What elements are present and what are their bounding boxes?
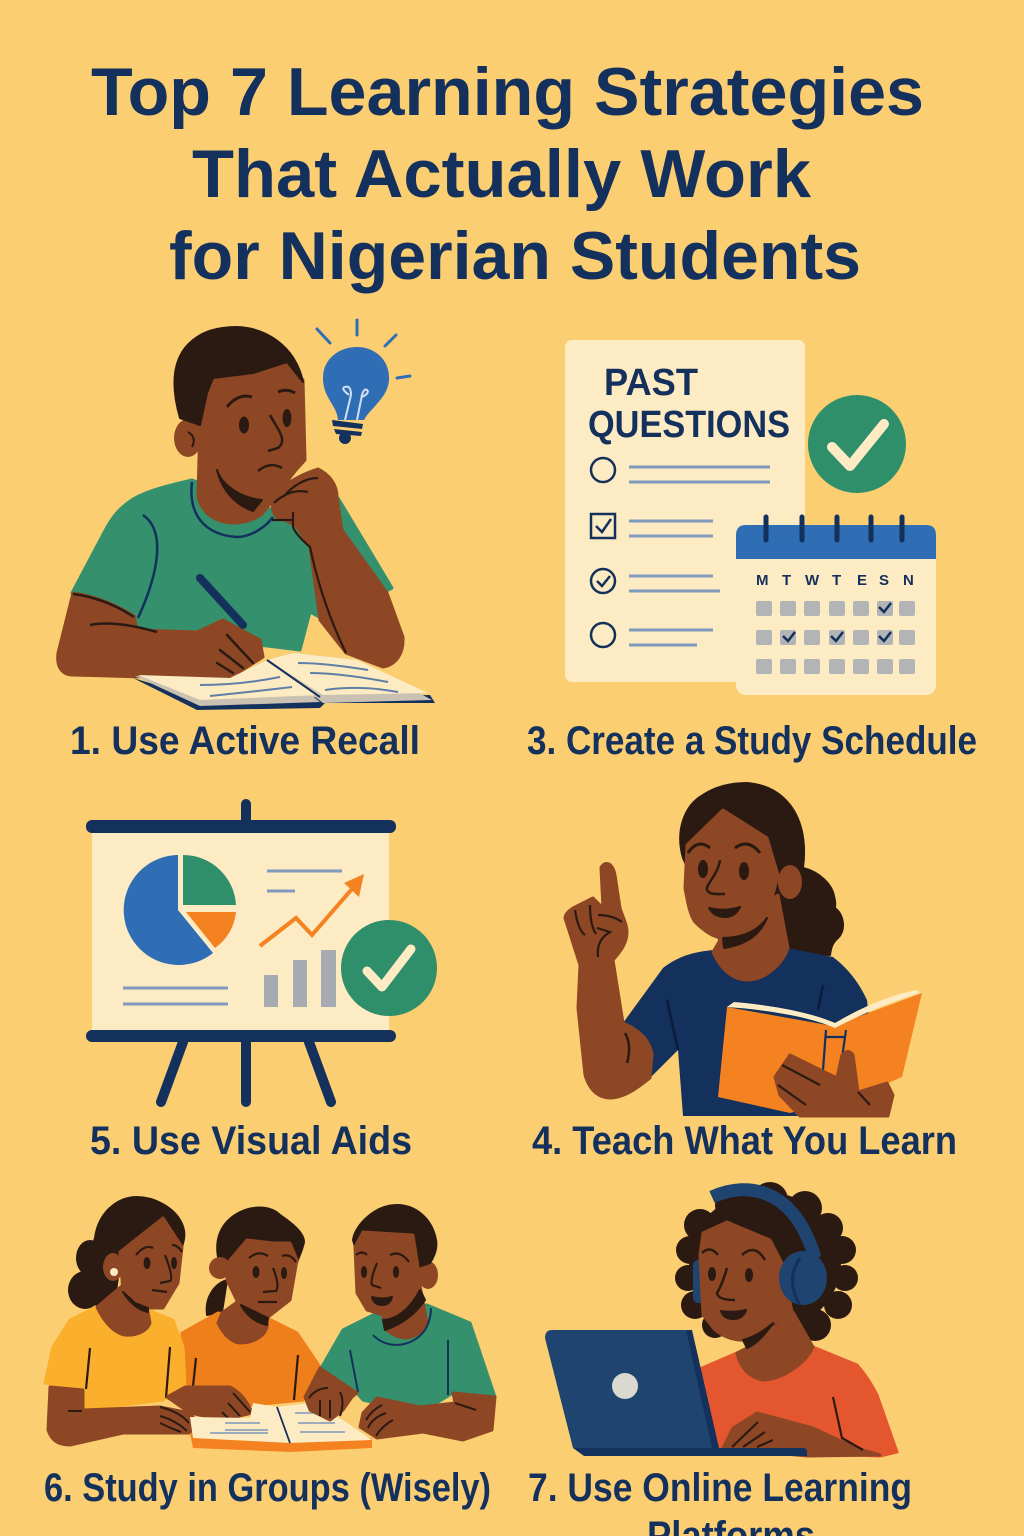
orange top [702, 1347, 897, 1456]
illustration: past questions and calendar: T [832, 572, 841, 589]
illustration: student using active recall [58, 320, 435, 710]
hair [680, 783, 843, 955]
illustration: past questions and calendar: PAST [604, 362, 698, 404]
light bulb [323, 347, 389, 420]
neck [737, 1312, 813, 1380]
board [92, 832, 389, 1030]
title: for Nigerian Students [169, 218, 861, 294]
left ear cup [693, 1260, 705, 1303]
shirt [72, 480, 392, 650]
illustration: study group [45, 1197, 495, 1452]
open book [133, 678, 435, 710]
neck [198, 420, 296, 523]
ear [778, 865, 802, 899]
illustration: presentation board [86, 804, 437, 1102]
illustration: past questions and calendar: E [857, 572, 867, 589]
label 7: 7. Use Online Learning [528, 1466, 912, 1510]
open book on table [190, 1403, 372, 1452]
girl in yellow shirt [45, 1197, 252, 1445]
pen [200, 578, 243, 625]
chin shadow [743, 1323, 773, 1348]
ear [174, 419, 202, 457]
pie chart [124, 855, 213, 965]
chin shadow [723, 918, 767, 948]
orange book [718, 993, 922, 1113]
hand holding book [775, 1052, 893, 1116]
title [91, 54, 924, 294]
neck [713, 895, 788, 980]
laptop [545, 1330, 717, 1448]
face [685, 810, 778, 938]
worksheet [565, 340, 805, 682]
illustration: past questions and calendar: T [782, 572, 791, 589]
label 1: 1. Use Active Recall [70, 719, 420, 763]
title: Top 7 Learning Strategies [91, 54, 924, 130]
hand on laptop [723, 1413, 880, 1456]
illustration: past questions and calendar: QUESTIONS [588, 404, 790, 446]
face [200, 362, 305, 498]
face [700, 1222, 792, 1340]
boy in green shirt [320, 1205, 495, 1408]
label 5: 5. Use Visual Aids [90, 1119, 412, 1163]
chin shadow [217, 470, 262, 511]
headphones [712, 1190, 815, 1258]
writing arm [58, 593, 263, 678]
illustration: past questions and calendar: W [805, 572, 820, 589]
raised hand [565, 864, 627, 965]
face details [708, 1267, 716, 1281]
text lines [123, 871, 342, 1004]
label 6: 6. Study in Groups (Wisely) [44, 1466, 491, 1510]
label 4: 4. Teach What You Learn [532, 1119, 957, 1163]
trend arrow [260, 882, 358, 946]
green check badge [341, 920, 437, 1016]
curly hair [675, 1182, 858, 1341]
illustration: past questions and calendar: N [903, 572, 914, 589]
girl in orange shirt [182, 1208, 320, 1405]
illustration: past questions and calendar [565, 340, 936, 695]
face details [698, 860, 708, 878]
face details [239, 416, 249, 434]
bars [264, 975, 278, 1007]
illustration: past questions and calendar: S [879, 572, 889, 589]
stand [161, 804, 331, 1102]
hair [175, 327, 303, 425]
shirt [623, 948, 880, 1116]
thinking arm [272, 469, 403, 667]
green check badge [808, 395, 906, 493]
title: That Actually Work [192, 136, 811, 212]
illustration: past questions and calendar: M [756, 572, 768, 589]
illustration: student on laptop with headphones [545, 1182, 897, 1456]
raised arm [578, 960, 652, 1098]
calendar [736, 525, 936, 695]
illustration: student teaching [565, 783, 922, 1116]
hands on the book [305, 1368, 495, 1440]
